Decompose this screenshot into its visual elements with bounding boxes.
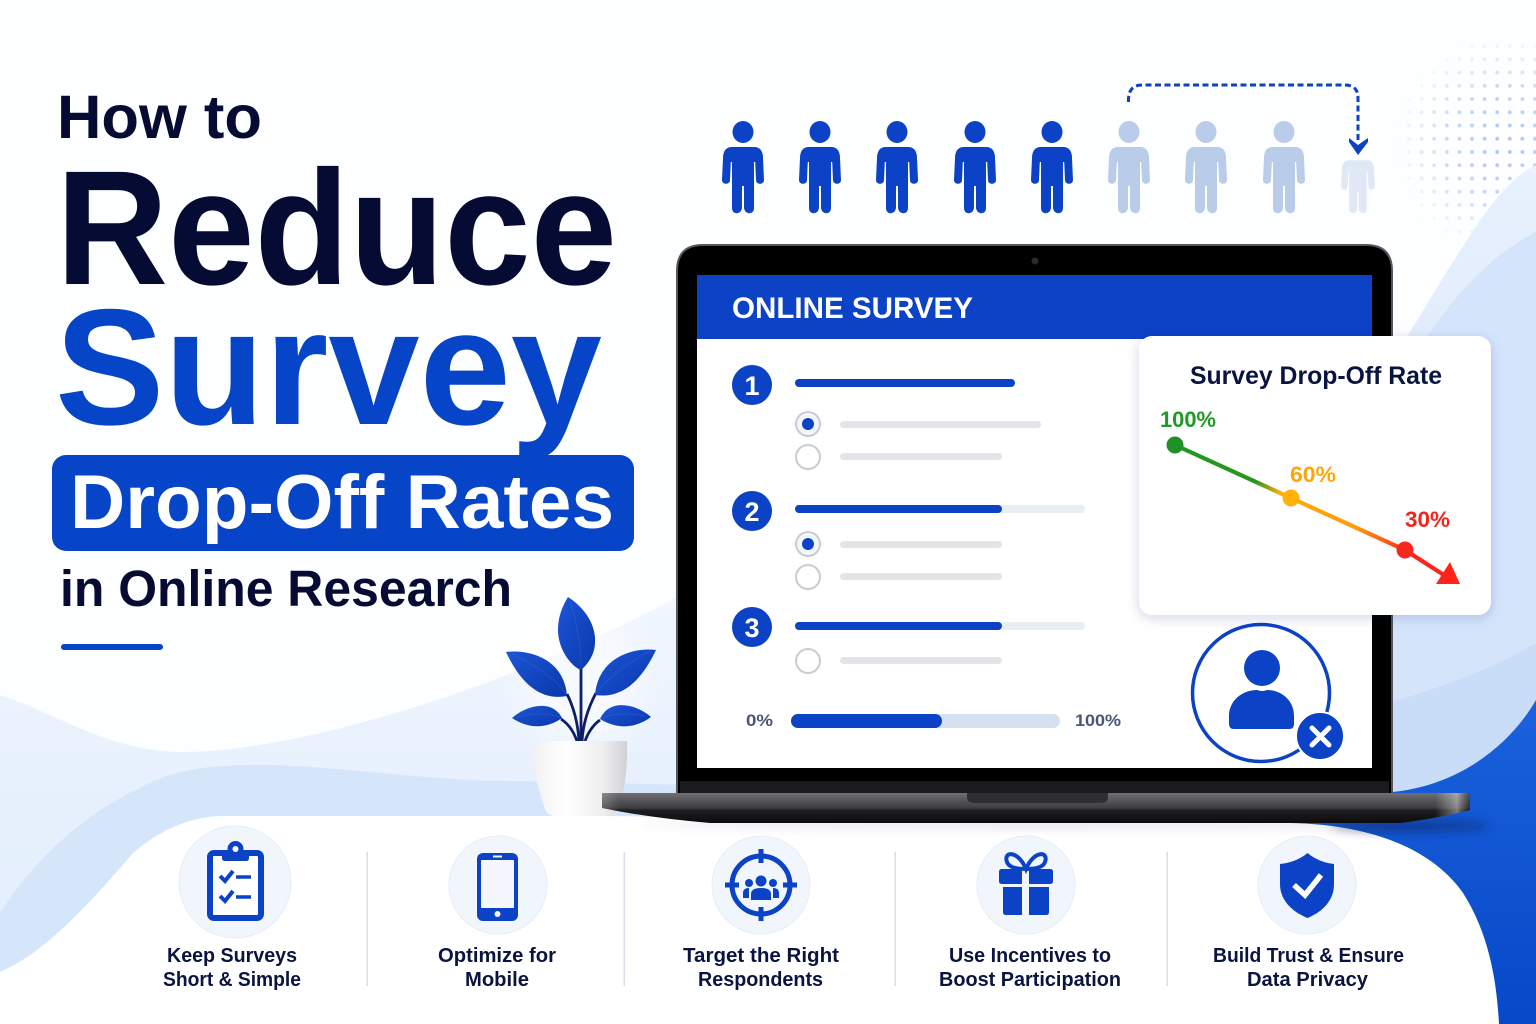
respondents row — [722, 85, 1375, 213]
tip label: Build Trust & Ensure — [1213, 945, 1404, 967]
title — [52, 83, 634, 650]
tip: target respondents — [683, 836, 839, 991]
tip label — [163, 945, 301, 991]
laptop notch — [967, 793, 1108, 803]
chart arrowhead — [1436, 562, 1460, 584]
question 1: 1 — [744, 371, 760, 401]
plant leaves — [506, 597, 656, 726]
point 60%: 60% — [1290, 462, 1336, 487]
laptop — [602, 245, 1490, 832]
tip label: Short & Simple — [163, 969, 301, 991]
tip label — [438, 945, 556, 991]
icon: faded respondent — [1341, 160, 1375, 213]
point 100% — [1160, 407, 1216, 454]
tip label: Mobile — [465, 969, 529, 991]
survey header — [697, 275, 1372, 339]
tip label — [1213, 945, 1404, 991]
tip label: Data Privacy — [1247, 969, 1369, 991]
progress bar: 0% — [746, 711, 773, 730]
tip: optimize for mobile — [438, 836, 556, 991]
title line: How to: How to — [57, 83, 262, 151]
question 2: 2 — [744, 497, 760, 527]
plant leaf veins — [512, 602, 650, 718]
question 3: 3 — [744, 613, 760, 643]
right waves — [1290, 165, 1536, 1024]
tip label — [683, 945, 839, 991]
title line: in Online Research: in Online Research — [60, 560, 512, 617]
tip label: Boost Participation — [939, 969, 1121, 991]
tip label: Respondents — [698, 969, 823, 991]
icon: shield — [1258, 836, 1356, 934]
dividers — [366, 852, 1168, 986]
chart title: Survey Drop-Off Rate — [1190, 362, 1442, 390]
tip label: Optimize for — [438, 945, 556, 967]
plant glow — [519, 615, 643, 745]
point 30% — [1396, 507, 1450, 558]
point 30%: 30% — [1405, 507, 1450, 532]
title highlight: Drop-Off Rates: Drop-Off Rates — [70, 460, 614, 545]
icon: target — [712, 836, 810, 934]
laptop screen — [697, 275, 1372, 768]
point 100%: 100% — [1160, 407, 1216, 432]
laptop chin — [680, 781, 1389, 794]
survey header: ONLINE SURVEY — [732, 292, 973, 325]
tip label: Use Incentives to — [949, 945, 1111, 967]
tip label: Keep Surveys — [167, 945, 297, 967]
chart line — [1175, 445, 1447, 577]
icon: gift — [977, 836, 1075, 934]
bottom white panel — [0, 816, 1499, 1024]
tip: build trust — [1213, 836, 1404, 991]
dotted pattern — [1407, 44, 1536, 234]
laptop lid — [677, 245, 1392, 795]
tip: use incentives — [939, 836, 1121, 991]
title underline — [61, 644, 163, 650]
progress bar — [746, 711, 1121, 730]
icon: dropped respondents — [1108, 121, 1305, 213]
laptop camera — [1032, 258, 1038, 264]
tip: keep surveys short — [163, 826, 301, 991]
progress bar: 100% — [1075, 711, 1121, 730]
question 3 — [732, 607, 1085, 673]
plant stems — [561, 668, 600, 741]
icon: active respondents — [722, 121, 1073, 213]
point 60% — [1282, 462, 1336, 506]
panel: drop-off rate chart — [1139, 336, 1491, 615]
icon: phone — [449, 836, 547, 934]
title line: Survey: Survey — [55, 275, 602, 459]
question 2 — [732, 491, 1085, 589]
plant — [506, 597, 656, 816]
tip label: Target the Right — [683, 945, 839, 967]
question 1 — [732, 365, 1041, 469]
laptop base shadow — [640, 820, 1490, 832]
survey screen — [697, 275, 1372, 762]
laptop base — [602, 793, 1470, 823]
tip label — [939, 945, 1121, 991]
icon: clipboard — [179, 826, 291, 938]
plant pot — [533, 741, 627, 816]
icon: user exiting survey — [1192, 624, 1344, 762]
title line: Reduce: Reduce — [56, 136, 617, 319]
arrow: dashed drop-off — [1128, 85, 1368, 155]
